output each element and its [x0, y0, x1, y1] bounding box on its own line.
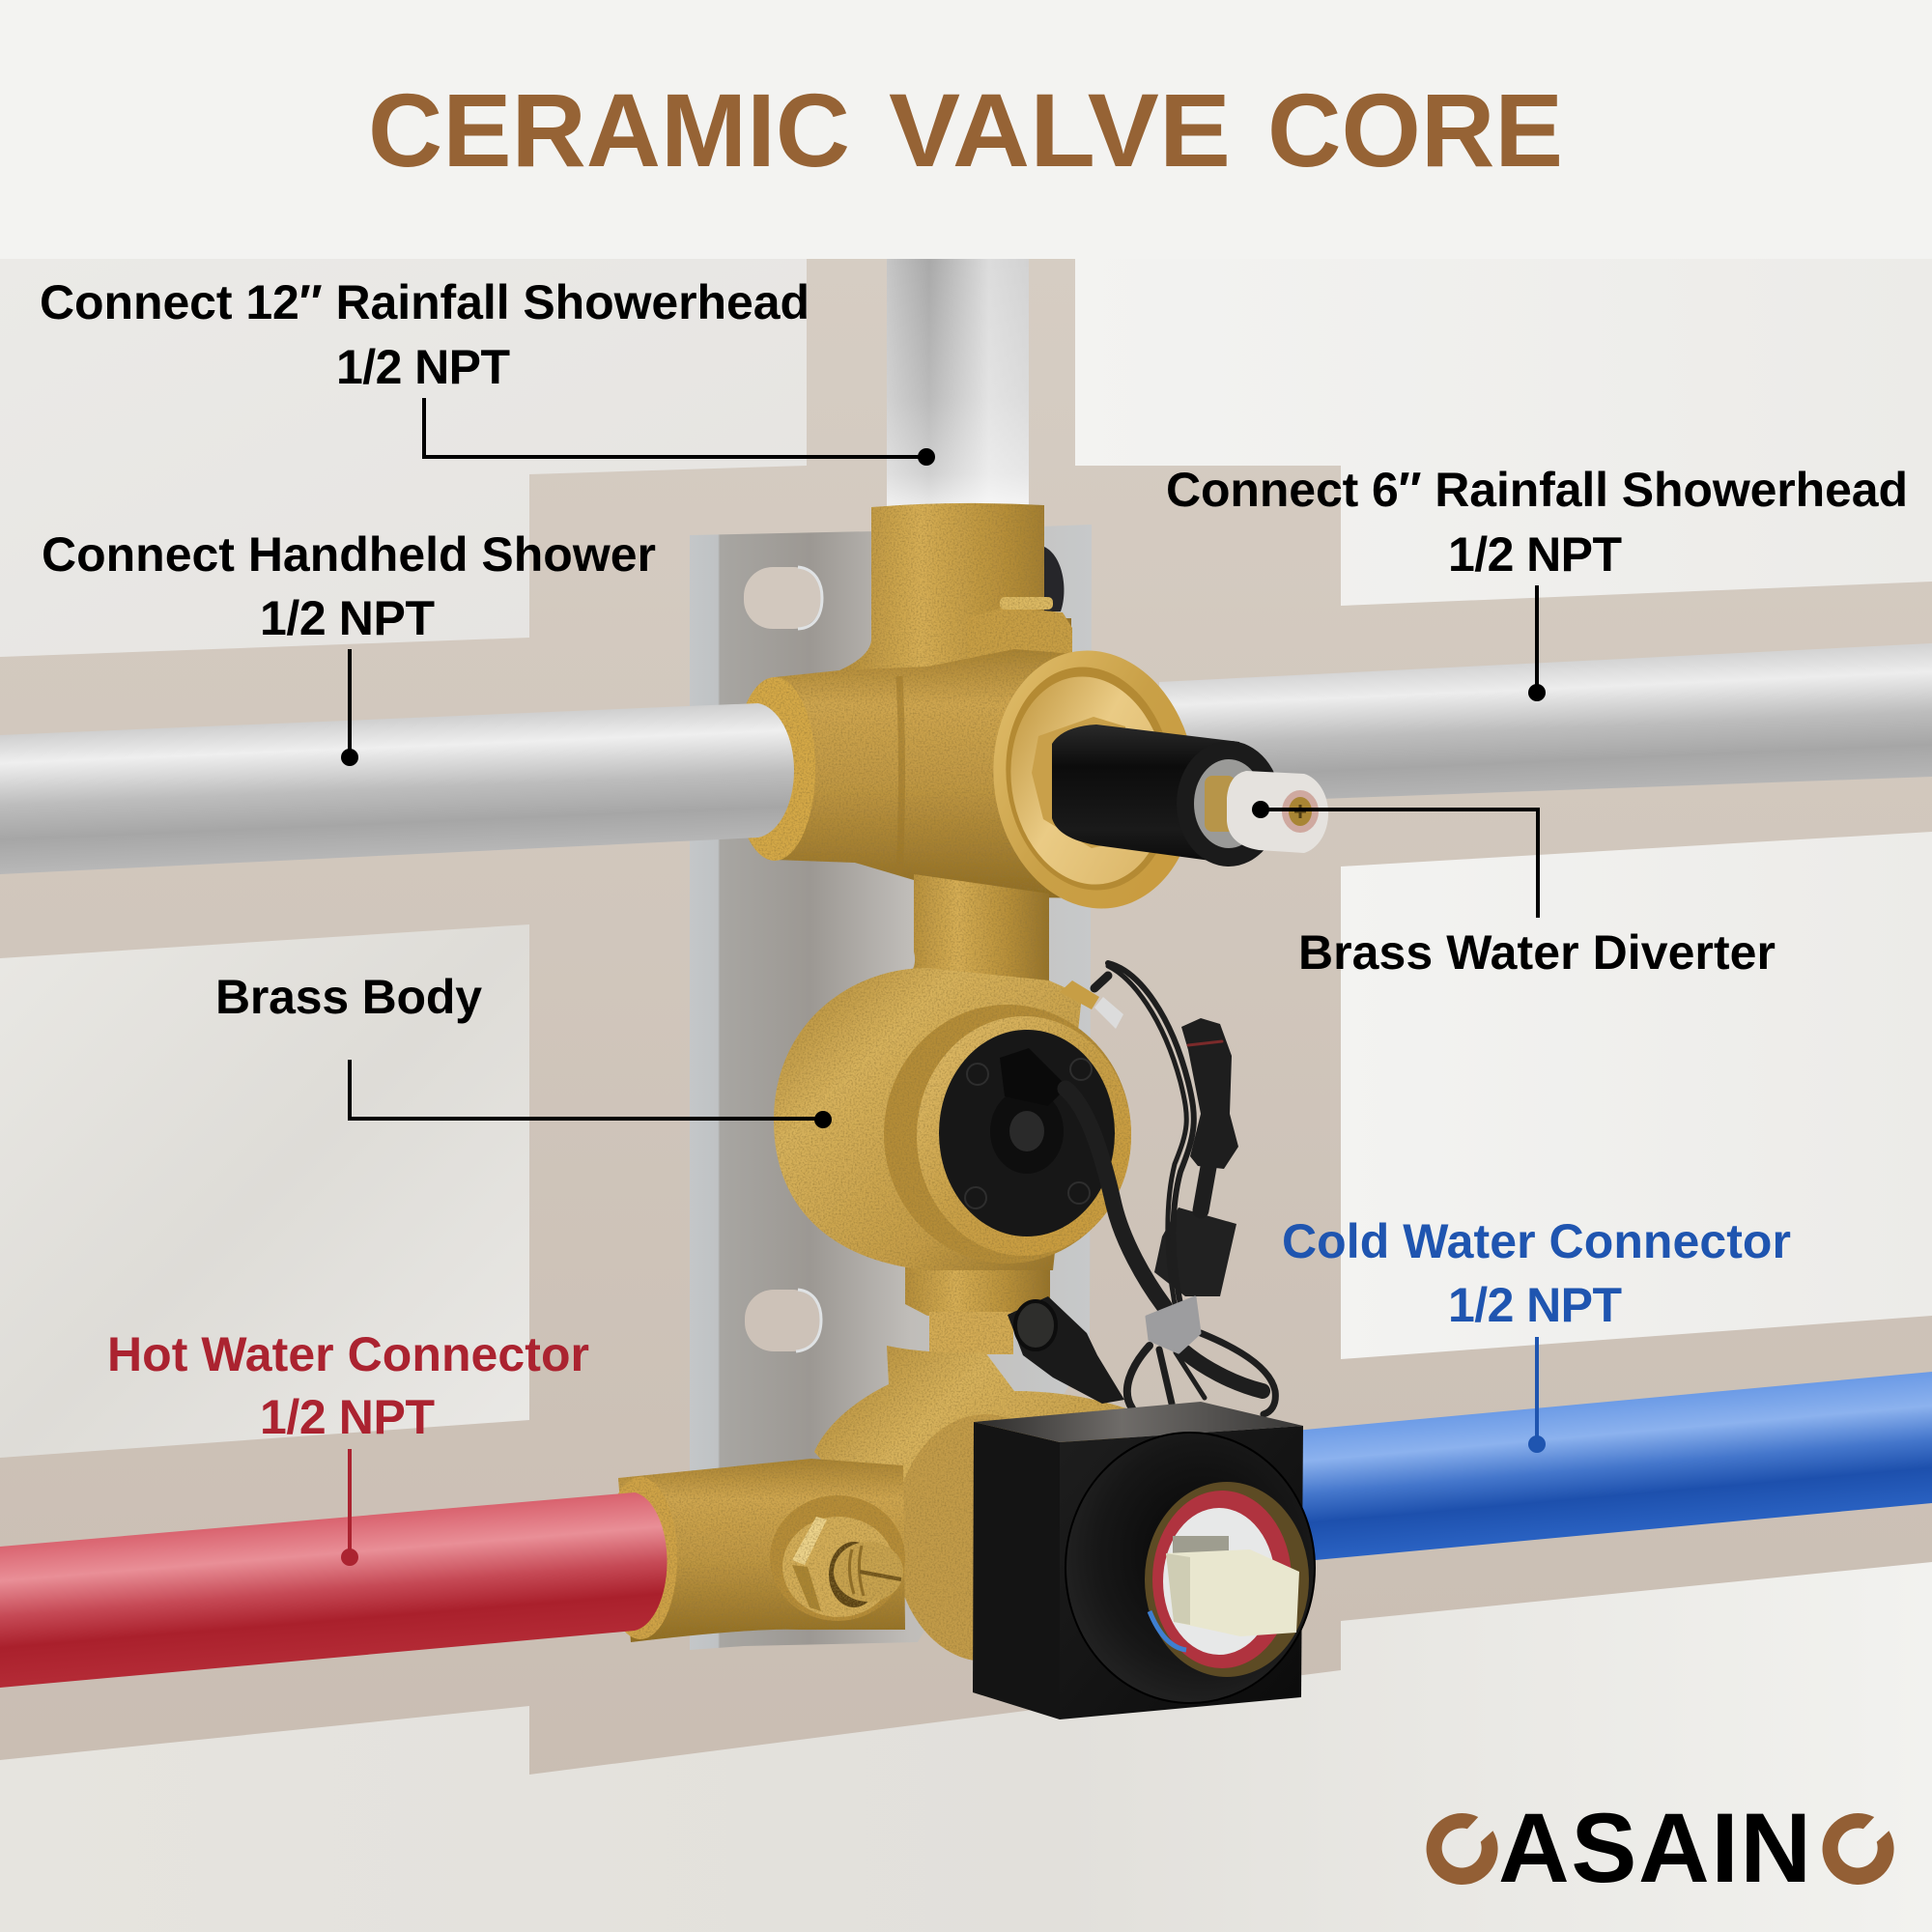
sensor stub [1094, 976, 1108, 988]
logo ring right [1823, 1813, 1894, 1885]
sensor silver nut [1094, 997, 1123, 1029]
hex face lower [792, 1565, 821, 1611]
pipe: left silver handheld outlet [0, 703, 794, 874]
thin loop left [1127, 1346, 1150, 1408]
callout: handheld shower: Connect Handheld Shower [42, 527, 656, 582]
cap hub [990, 1089, 1064, 1174]
callout: cold water connector [1282, 1214, 1791, 1453]
T body [775, 649, 1111, 898]
rear screw [1044, 547, 1064, 611]
thick cable from cap [1065, 1089, 1164, 1306]
stem recess [1173, 1536, 1229, 1563]
collar [929, 1312, 1013, 1354]
sleeve end [1177, 741, 1281, 867]
socket face [1015, 1301, 1056, 1350]
bezel opening [1145, 1482, 1309, 1677]
white cartridge disc [1163, 1508, 1275, 1655]
sensor brass fitting [1060, 980, 1099, 1009]
sphere band [894, 1414, 1077, 1662]
callout: 6 inch rainfall showerhead: Connect 6″ Rainfall Showerhead [1166, 463, 1908, 517]
middle cylinder [774, 968, 1082, 1270]
hex face upper [792, 1517, 827, 1565]
nut washer [770, 1495, 905, 1621]
callout: 12 inch rainfall showerhead [40, 275, 935, 466]
callout: brass body [215, 970, 832, 1128]
cap dents [965, 1059, 1092, 1208]
callout: hot water connector: Hot Water Connector [107, 1327, 589, 1381]
port outer rim [977, 638, 1212, 922]
brass valve body upper [734, 503, 1111, 1316]
title [368, 71, 1563, 188]
thin wire right [1176, 1352, 1205, 1398]
title: CERAMIC [368, 71, 850, 188]
cream stem [1166, 1549, 1299, 1636]
callout: brass water diverter [1252, 801, 1776, 980]
thin loop right [1201, 1333, 1275, 1414]
sensor wire one [1108, 963, 1194, 1304]
sensor wire two [1108, 966, 1186, 1304]
pipe: top silver rainfall outlet [887, 259, 1029, 512]
callout: hot water connector [107, 1327, 589, 1566]
grey ring [1194, 759, 1264, 848]
mounting bracket [690, 525, 1092, 1650]
callout: 6 inch rainfall showerhead: 1/2 NPT [1448, 527, 1622, 582]
red cartridge ring [1152, 1491, 1292, 1668]
thin wire centre [1159, 1350, 1172, 1404]
ferrite core [1154, 1208, 1236, 1296]
hex nut [1032, 717, 1125, 848]
title: VALVE [889, 71, 1231, 188]
socket boss [968, 607, 1072, 667]
callout: 12 inch rainfall showerhead: 1/2 NPT [336, 340, 510, 394]
port inner [998, 667, 1179, 895]
screw grooves [849, 1546, 864, 1596]
nut body [782, 1517, 895, 1617]
diverter cartridge [1052, 724, 1328, 867]
pipe: red hot water [0, 1492, 668, 1688]
round bezel [1065, 1433, 1315, 1703]
box front face [1060, 1426, 1303, 1719]
grey tape [1147, 1297, 1200, 1352]
box top face [974, 1402, 1303, 1442]
screw slot [860, 1572, 901, 1579]
black square escutcheon [973, 1402, 1315, 1719]
top socket [839, 503, 1071, 670]
pipe: blue cold water [1294, 1372, 1932, 1562]
header band [0, 0, 1932, 259]
logo [1427, 1793, 1894, 1903]
mounting hole upper [744, 567, 822, 629]
cable knot [1000, 1048, 1067, 1106]
wires and connectors [1008, 963, 1275, 1414]
left port rim [734, 677, 815, 861]
callout: brass water diverter: Brass Water Diverter [1298, 925, 1776, 980]
stem shaded side [1166, 1553, 1190, 1625]
callout: cold water connector: 1/2 NPT [1448, 1278, 1622, 1332]
callout: handheld shower: 1/2 NPT [260, 591, 435, 645]
brass valve body middle [774, 968, 1131, 1270]
screw thread [834, 1542, 903, 1602]
face ring [917, 1016, 1131, 1256]
callout: cold water connector: Cold Water Connector [1282, 1214, 1791, 1268]
lower dome [814, 1346, 1126, 1662]
pipe: right silver outlet [1159, 643, 1932, 805]
screw hole [829, 1542, 879, 1607]
callout: hot water connector: 1/2 NPT [260, 1390, 435, 1444]
lower brass [604, 1312, 1126, 1662]
mounting hole lower [745, 1290, 821, 1351]
logo wordmark: ASAIN [1498, 1793, 1811, 1903]
side pipe [618, 1459, 905, 1642]
black thermostat cap [939, 1030, 1115, 1236]
brass stem [1205, 776, 1236, 832]
hot port rim [604, 1477, 677, 1639]
right port [977, 638, 1212, 922]
lower neck [905, 1227, 1050, 1316]
knob screw [1282, 790, 1319, 833]
callout: handheld shower [42, 527, 656, 766]
logo ring left [1427, 1813, 1498, 1885]
cable lower [1185, 1352, 1263, 1391]
body crease [899, 676, 902, 874]
callout: brass body: Brass Body [215, 970, 482, 1024]
white ceramic knob [1227, 771, 1328, 853]
boss pin [1000, 597, 1053, 610]
flange [884, 1005, 1131, 1264]
black socket connector [1008, 1296, 1124, 1404]
waterproof connector [1181, 1018, 1238, 1169]
callout: 6 inch rainfall showerhead [1166, 463, 1908, 701]
black sleeve [1052, 724, 1239, 865]
upper neck [908, 874, 1049, 995]
title: CORE [1267, 71, 1563, 188]
box left face [973, 1422, 1060, 1719]
connector cable [1201, 1156, 1210, 1210]
callout: 12 inch rainfall showerhead: Connect 12″ Rainfall Showerhead [40, 275, 810, 329]
cap disc [939, 1030, 1115, 1236]
hub centre [1009, 1111, 1044, 1151]
connector seal [1188, 1041, 1222, 1045]
blue arc [1150, 1611, 1186, 1650]
port thread ring [992, 656, 1187, 901]
